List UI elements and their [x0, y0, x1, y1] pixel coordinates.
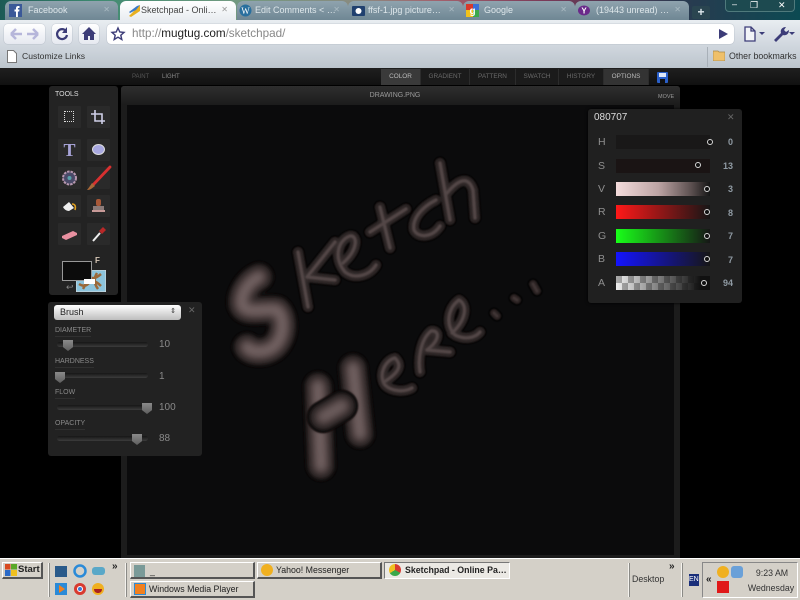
reload button	[52, 24, 72, 44]
button: new tab: +	[697, 5, 704, 19]
background pattern swatch	[76, 270, 106, 292]
task button: Sketchpad active	[384, 562, 510, 579]
language indicator: EN	[689, 576, 699, 583]
tool: crop	[87, 106, 110, 128]
tool: eraser	[58, 223, 81, 245]
task button: Sketchpad active: Sketchpad - Online Pa…	[405, 565, 507, 575]
tab: options	[604, 69, 649, 85]
bar: hue	[616, 135, 710, 149]
label: flow: FLOW	[55, 389, 75, 396]
knob: green	[704, 233, 710, 239]
button: new tab	[692, 6, 710, 19]
strokes: large letters	[242, 277, 360, 466]
clock time: 9:23 AM	[756, 568, 788, 578]
panel: brush settings	[48, 302, 202, 456]
value: opacity: 88	[159, 433, 170, 444]
tab: Sketchpad active	[120, 1, 236, 21]
foreground color swatch	[62, 261, 92, 281]
label: B: B	[598, 253, 605, 265]
white swap marker	[84, 279, 95, 284]
task button: Yahoo Messenger	[257, 562, 382, 579]
divider	[628, 563, 630, 597]
tab: Edit Comments: Edit Comments < …	[255, 5, 336, 15]
tab: Edit Comments	[237, 1, 348, 20]
swatch F label: F	[95, 256, 100, 265]
tab: pattern: PATTERN	[478, 73, 507, 80]
tab: Google: ✕	[560, 5, 567, 14]
start button	[2, 562, 43, 579]
brush dropdown: ⇕	[170, 308, 176, 315]
brush dropdown: Brush	[60, 307, 84, 317]
tab: Google	[463, 1, 575, 20]
tab: Yahoo mail	[575, 1, 689, 20]
label: G: G	[598, 230, 606, 242]
bookmark: Customize Links	[7, 50, 85, 63]
panel: tools	[49, 86, 118, 295]
back and forward buttons	[4, 24, 45, 44]
tray icon: messenger	[717, 566, 729, 578]
knob: alpha	[701, 280, 707, 286]
tab: Yahoo mail: (19443 unread) …	[596, 5, 669, 15]
icon: paint brush	[87, 166, 112, 190]
bar: alpha	[616, 276, 710, 290]
browser toolbar	[0, 20, 800, 68]
sketchpad menu bar	[0, 68, 800, 85]
strokes: dots	[494, 284, 537, 316]
value: saturation: 13	[723, 161, 733, 171]
bookmark: Customize Links: Customize Links	[22, 51, 85, 61]
value: red: 8	[728, 208, 733, 218]
tab: Facebook: ✕	[103, 5, 110, 14]
icon: wrench menu	[774, 27, 795, 42]
bar: saturation	[616, 159, 710, 173]
tray expand: «	[706, 574, 712, 585]
icon: star	[110, 26, 126, 41]
tray icon: antivirus	[717, 581, 729, 593]
drawing header	[121, 86, 680, 105]
bar: value	[616, 182, 710, 196]
label: hardness: HARDNESS	[55, 358, 94, 365]
tab: options: OPTIONS	[612, 73, 640, 80]
task button: Windows Media Player: Windows Media Player	[149, 584, 238, 594]
handle: diameter	[63, 340, 73, 351]
taskbar divider	[125, 563, 127, 597]
value: hardness: 1	[159, 371, 165, 382]
move label: MOVE	[658, 94, 674, 100]
bar: blue	[616, 252, 710, 266]
tray icon: network	[731, 566, 743, 578]
window controls: ❐	[750, 0, 758, 10]
label: A: A	[598, 277, 605, 289]
tab: Facebook: Facebook	[28, 5, 68, 15]
slider: diameter	[57, 342, 148, 347]
color hex heading: 080707	[594, 112, 627, 123]
knob: value	[704, 186, 710, 192]
label: diameter: DIAMETER	[55, 327, 91, 334]
window controls: ✕	[778, 0, 786, 10]
home button	[79, 24, 99, 44]
brush panel close: ✕	[188, 305, 196, 315]
slider: opacity	[57, 436, 148, 441]
tab: ffsf-1.jpg: ✕	[448, 5, 455, 14]
canvas	[127, 105, 674, 555]
slider: hardness	[57, 373, 148, 378]
tool: eyedropper	[87, 223, 110, 245]
strokes: small letters	[298, 163, 480, 391]
handle: flow	[142, 403, 152, 414]
knob: red	[704, 209, 710, 215]
tab: gradient	[421, 69, 470, 85]
tab: pattern	[470, 69, 516, 85]
tab: Sketchpad active: Sketchpad - Onli…	[141, 5, 217, 15]
swap arrow: ↩	[66, 282, 74, 292]
tools heading: TOOLS	[55, 91, 79, 98]
value: flow: 100	[159, 402, 176, 413]
start button: Start	[18, 564, 40, 575]
icon: save	[657, 72, 668, 83]
handle: hardness	[55, 372, 65, 383]
icon: go arrow	[719, 29, 728, 39]
icon: page menu	[744, 26, 765, 42]
strokes: H crossbar	[323, 406, 342, 417]
task button: Windows Media Player	[130, 581, 255, 598]
knob: hue	[707, 139, 713, 145]
tab: ffsf-1.jpg: ffsf-1.jpg picture…	[368, 5, 441, 15]
value: green: 7	[728, 231, 733, 241]
taskbar	[0, 558, 800, 600]
label: R: R	[598, 206, 606, 218]
tab: Sketchpad active: ✕	[221, 5, 228, 14]
value: diameter: 10	[159, 339, 170, 350]
url text: http://mugtug.com/sketchpad/	[132, 27, 285, 40]
value: hue: 0	[728, 137, 733, 147]
tab: Yahoo mail: Y	[581, 6, 587, 16]
bar: red	[616, 205, 710, 219]
taskbar divider	[48, 563, 50, 597]
label: opacity: OPACITY	[55, 420, 85, 427]
address bar	[107, 24, 734, 44]
tab: Yahoo mail: ✕	[674, 5, 681, 14]
quick launch icons	[55, 564, 105, 595]
label: H: H	[598, 136, 606, 148]
tab: color: COLOR	[389, 73, 412, 80]
desktop toolbar more: »	[669, 561, 675, 572]
tool: ellipse	[87, 139, 110, 161]
bookmarks divider	[707, 47, 708, 67]
quick launch more: »	[112, 561, 118, 572]
language indicator	[689, 574, 699, 586]
tab: Facebook	[5, 1, 118, 20]
bookmark: Other bookmarks: Other bookmarks	[729, 51, 796, 61]
panel: color picker	[588, 109, 742, 303]
panel: drawing	[121, 86, 680, 558]
task button: blank window: _	[150, 566, 155, 576]
knob: blue	[704, 256, 710, 262]
value: value: 3	[728, 184, 733, 194]
tab: color	[381, 69, 421, 85]
tab: swatch	[516, 69, 559, 85]
tab: gradient: GRADIENT	[428, 73, 462, 80]
value: blue: 7	[728, 255, 733, 265]
tab: Edit Comments: W	[241, 6, 250, 16]
tab: history: HISTORY	[567, 73, 595, 80]
tool: marquee	[58, 106, 81, 128]
knob: saturation	[695, 162, 701, 168]
label: V: V	[598, 183, 605, 195]
bar: green	[616, 229, 710, 243]
tool: text: T	[63, 140, 76, 160]
brush dropdown	[54, 305, 181, 320]
tool: text	[58, 139, 81, 161]
menu: light: LIGHT	[162, 74, 180, 80]
drawing title: DRAWING.PNG	[370, 92, 420, 99]
tool: stamp	[87, 195, 110, 217]
label: S: S	[598, 160, 605, 172]
menu: paint: PAINT	[132, 74, 149, 80]
color panel close: ✕	[727, 112, 735, 122]
tab: ffsf-1.jpg	[348, 1, 463, 20]
tab: Google: g	[469, 6, 476, 17]
task button: Yahoo Messenger: Yahoo! Messenger	[276, 565, 349, 575]
task button: blank window	[130, 562, 255, 579]
slider: flow	[57, 405, 148, 410]
handle: opacity	[132, 434, 142, 445]
tool: brush	[87, 167, 110, 189]
tool: shape flower	[58, 167, 81, 189]
tab: swatch: SWATCH	[524, 73, 550, 80]
tab: history	[559, 69, 604, 85]
value: alpha: 94	[723, 278, 733, 288]
tab: Google: Google	[484, 5, 513, 15]
desktop toolbar label: Desktop	[632, 574, 664, 584]
foreground and background swatches	[62, 261, 106, 292]
clock day: Wednesday	[748, 583, 794, 593]
tab: Edit Comments: ✕	[333, 5, 340, 14]
divider	[681, 563, 683, 597]
window controls	[725, 0, 795, 12]
system tray	[702, 562, 798, 598]
tool: fill bucket	[58, 195, 81, 217]
chrome window frame	[0, 0, 800, 20]
